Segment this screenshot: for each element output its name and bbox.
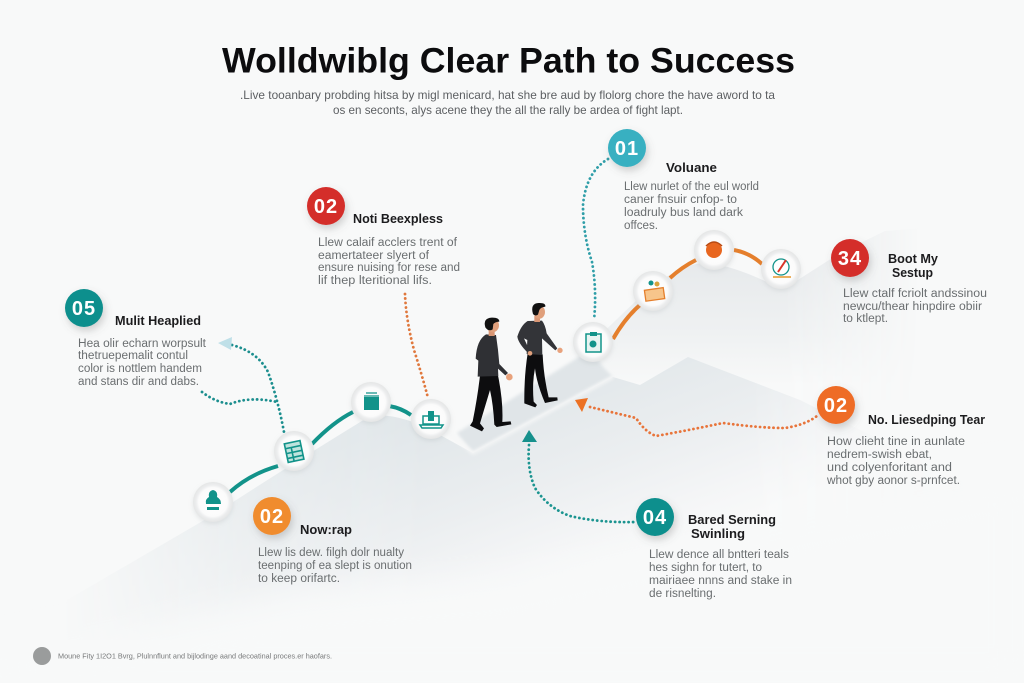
step: No. Liesedping Tear <box>817 386 985 487</box>
title: Wolldwiblg Clear Path to Success <box>222 40 795 80</box>
body text: offces. <box>624 220 658 232</box>
body text: Llew dence all bntteri teals <box>649 549 789 561</box>
dotted connector: red 02 <box>405 294 428 398</box>
dotted connector and arrow: 05 <box>202 337 284 432</box>
badge 05: 05 <box>72 298 96 320</box>
subtitle: os en seconts, alys acene they the all the rally be ardea of fight lapt. <box>333 103 683 117</box>
step: Bared Serning Swinling <box>636 498 792 600</box>
badge red 02 <box>307 187 345 225</box>
node: document icon <box>274 431 314 471</box>
body text: color is nottlem handem <box>78 363 202 375</box>
body text <box>843 288 987 325</box>
body text: caner fnsuir cnfop- to <box>624 194 737 206</box>
badge 04 <box>636 498 674 536</box>
teal path segments <box>230 406 411 492</box>
badge red 02: 02 <box>314 196 338 218</box>
heading: Swinling <box>691 527 745 541</box>
subtitle <box>240 88 775 117</box>
body text: lif thep lteritional lifs. <box>318 275 432 287</box>
badge 01: 01 <box>615 138 639 160</box>
body text: to ktlept. <box>843 313 888 325</box>
body text: Hea olir echarn worpsult <box>78 338 207 350</box>
body text <box>78 338 207 388</box>
dotted connector and arrow: orange 02 <box>575 398 817 436</box>
node: person icon <box>193 482 233 522</box>
body text: and stans dir and dabs. <box>78 376 199 388</box>
body text: Llew nurlet of the eul world <box>624 181 759 193</box>
body text: Llew lis dew. filgh dolr nualty <box>258 547 404 559</box>
badge orange-red 02 <box>817 386 855 424</box>
figure: rear walker <box>517 303 563 407</box>
badge 05 <box>65 289 103 327</box>
heading <box>888 252 938 280</box>
step: Now:rap <box>253 497 412 585</box>
body text: Llew ctalf fcriolt andssinou <box>843 288 987 300</box>
subtitle: .Live tooanbary probding hitsa by migl menicard, hat she bre aud by flolorg chore the have aword to ta <box>240 88 775 102</box>
body text: hes sighn for tutert, to <box>649 562 762 574</box>
dotted connector and arrow: 04 <box>522 430 636 522</box>
heading <box>688 513 776 541</box>
step: Noti Beexpless <box>307 187 460 287</box>
orange path segments <box>613 250 762 339</box>
heading: Sestup <box>892 266 933 280</box>
step: Boot My Sestup <box>831 239 987 325</box>
dotted connector: 01 <box>583 159 608 320</box>
body text: de risnelting. <box>649 588 716 600</box>
body text: thetruepemalit contul <box>78 350 188 362</box>
node: gauge icon <box>761 249 801 289</box>
badge 34: 34 <box>838 248 862 270</box>
body text: teenping of ea slept is onution <box>258 560 412 572</box>
body text <box>826 436 965 487</box>
heading: Boot My <box>888 252 938 266</box>
body text <box>624 181 759 232</box>
body text: newcu/thear hinpdire obiir <box>843 301 982 313</box>
body text: How clieht tine in aunlate <box>827 436 965 448</box>
heading: Now:rap <box>300 523 352 537</box>
body text: loadruly bus land dark <box>624 207 743 219</box>
heading: Bared Serning <box>688 513 776 527</box>
node: clipboard icon <box>573 322 613 362</box>
body text: eamertateer slyert of <box>318 250 430 262</box>
badge orange-red 02: 02 <box>824 395 848 417</box>
walking figures <box>470 303 563 431</box>
node: calendar icon <box>633 271 673 311</box>
badge 01 <box>608 129 646 167</box>
badge 04: 04 <box>643 507 667 529</box>
footer <box>33 647 332 665</box>
heading: Mulit Heaplied <box>115 314 201 328</box>
body text: nedrem-swish ebat, <box>827 449 932 461</box>
step: Mulit Heaplied <box>65 289 207 388</box>
badge orange 02 <box>253 497 291 535</box>
footer note: Moune Fity 1I2O1 Bvrg, Plulnnflunt and bijlodinge aand decoatinal proces.er haofars. <box>58 652 332 660</box>
body text: ensure nuising for rese and <box>318 262 460 274</box>
body text <box>258 547 412 585</box>
body text <box>318 237 460 287</box>
badge 34 <box>831 239 869 277</box>
body text: to keep orifartc. <box>258 573 340 585</box>
badge orange 02: 02 <box>260 506 284 528</box>
footer logo <box>33 647 51 665</box>
body text <box>649 549 792 600</box>
node: badge icon <box>694 230 734 270</box>
body text: Llew calaif acclers trent of <box>318 237 458 249</box>
heading: No. Liesedping Tear <box>868 413 985 427</box>
heading: Noti Beexpless <box>353 212 443 226</box>
node: desk icon <box>411 399 451 439</box>
heading: Voluane <box>666 161 717 175</box>
figure: front walker <box>470 318 513 431</box>
node: box icon <box>351 382 391 422</box>
body text: whot gby aonor s-prnfcet. <box>826 475 960 487</box>
body text: mairiaee nnns and stake in <box>649 575 792 587</box>
step: Voluane <box>608 129 759 232</box>
mountain ridge terrain <box>173 259 843 588</box>
body text: und colyenforitant and <box>827 462 952 474</box>
